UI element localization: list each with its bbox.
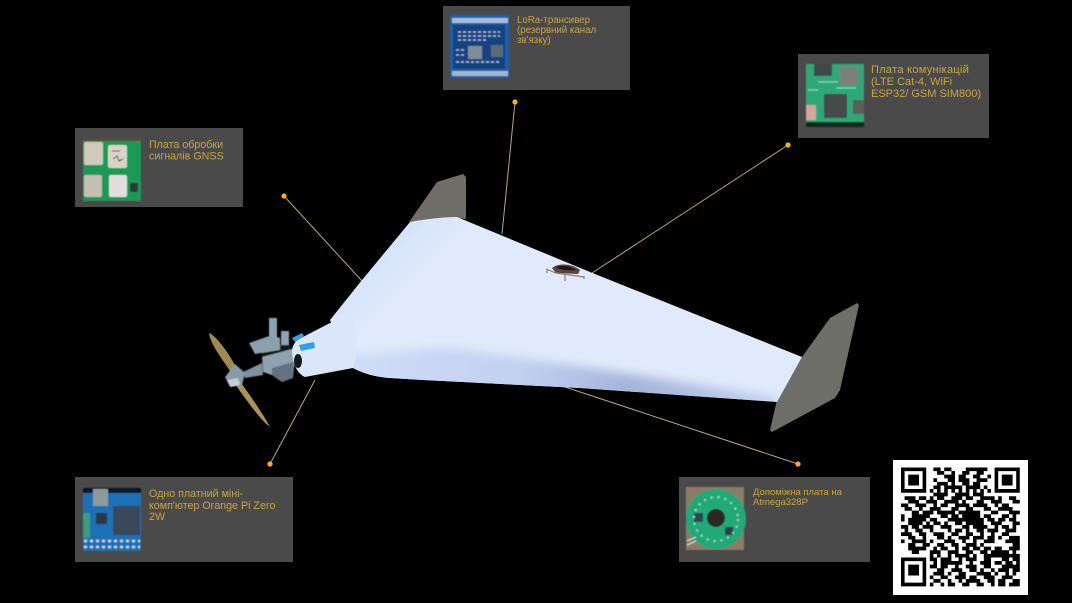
leader line: Orange Pi — [267, 380, 315, 467]
rear fuselage — [292, 320, 357, 377]
label: GNSS text: Плата обробки — [149, 139, 223, 151]
right fin — [770, 303, 859, 432]
motor mount — [225, 318, 295, 387]
label: GNSS text: сигналів GNSS — [149, 150, 224, 162]
propeller — [209, 333, 270, 427]
label: Orange Pi text: 2W — [149, 511, 166, 523]
leader line: Atmega — [565, 387, 801, 467]
label: LoRa text: зв'язку) — [517, 35, 551, 46]
panel: LoRa transceiver — [443, 6, 630, 90]
label: communications text: ESP32/ GSM SIM800) — [871, 88, 981, 100]
panel: communications board — [798, 54, 989, 138]
QR code — [893, 460, 1028, 595]
panel: GNSS board — [75, 128, 243, 207]
label: Atmega text: Atmega328P — [753, 497, 808, 508]
panel: Orange Pi mini-computer — [75, 477, 293, 562]
lower surface shading — [353, 346, 778, 402]
left fin — [409, 174, 466, 222]
drone illustration — [209, 174, 859, 432]
label: LoRa text: LoRa-трансивер — [517, 15, 590, 26]
wing body — [330, 217, 802, 402]
label: Atmega text: Допоміжна плата на — [753, 487, 843, 498]
label: Orange Pi text: комп'ютер Orange Pi Zero — [149, 500, 275, 512]
label: communications text: Плата комунікацій — [871, 64, 969, 76]
thumbnail: Atmega ring board — [686, 487, 746, 550]
blue connector — [292, 333, 315, 351]
top hatch — [546, 264, 584, 281]
panel: auxiliary Atmega board — [679, 477, 870, 562]
thumbnail: Orange Pi board — [83, 488, 141, 551]
label: LoRa text: (резервний канал — [517, 25, 596, 36]
motor opening — [294, 354, 302, 368]
leader line: LoRa — [502, 99, 518, 234]
thumbnail: communications board — [806, 64, 864, 127]
thumbnail: LoRa board — [450, 15, 509, 78]
thumbnail: GNSS board — [83, 138, 141, 201]
label: communications text: (LTE Cat-4, WiFi — [871, 76, 952, 88]
leader line: GNSS — [281, 193, 362, 281]
leader line: communications — [592, 142, 791, 273]
label: Orange Pi text: Одно платний міні- — [149, 488, 244, 500]
